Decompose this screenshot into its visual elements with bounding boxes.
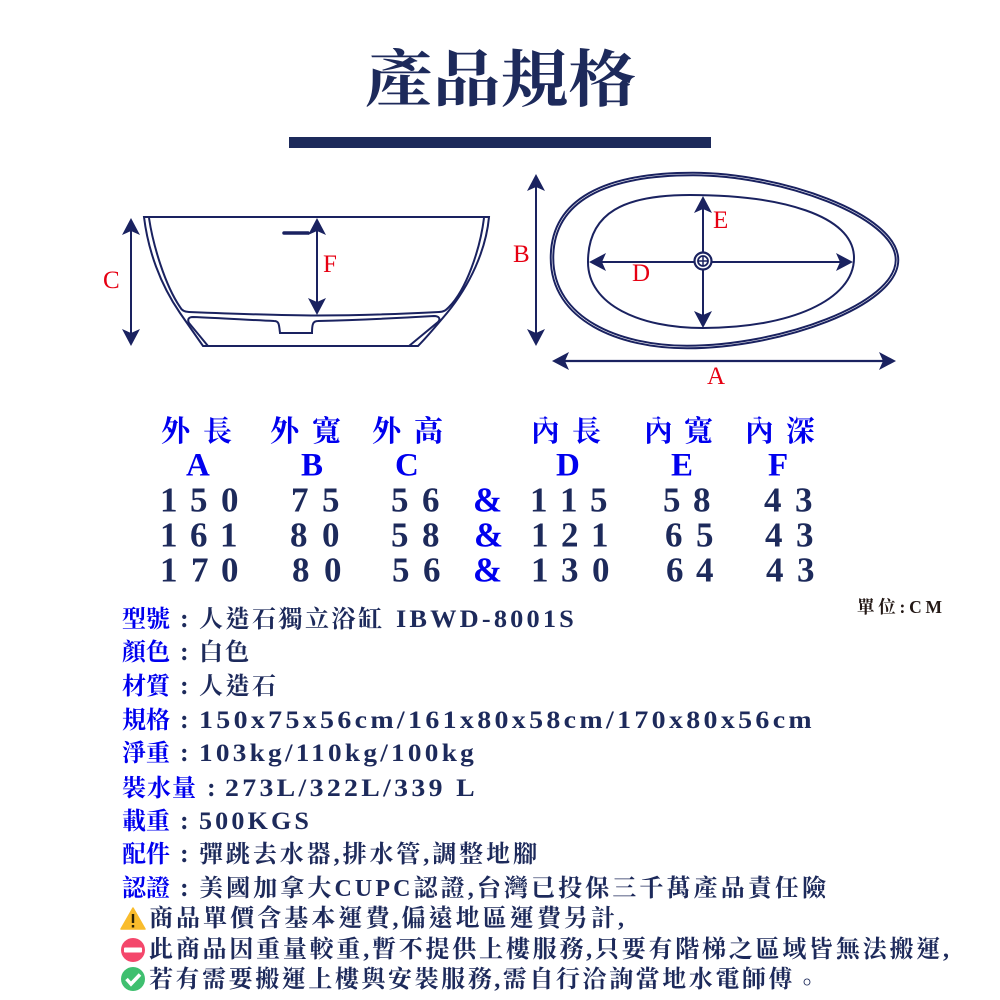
spec: load: 載重	[122, 808, 170, 835]
arrow F	[316, 230, 318, 305]
arrow C	[130, 230, 132, 334]
table row 170: &	[473, 550, 502, 590]
table row 161	[160, 516, 814, 554]
table row 150: 58	[663, 480, 710, 520]
unit note: 單位:CM	[857, 597, 942, 617]
table row 161: 65	[665, 516, 714, 554]
arrow D	[600, 261, 842, 263]
table row 161: 58	[391, 516, 440, 554]
spec: material: 材質	[122, 673, 173, 700]
tub side outline	[144, 217, 489, 346]
table row 161: 161	[160, 516, 238, 554]
spec: material: :	[180, 671, 189, 700]
spec: colour: 白色	[199, 639, 249, 666]
spec: accessories: :	[180, 839, 189, 868]
table row 170: 56	[392, 550, 440, 590]
table row 150: 115	[530, 480, 608, 520]
icon: warning triangle	[121, 908, 145, 929]
icon: no entry	[121, 938, 145, 962]
table row 150	[160, 480, 812, 520]
faucet slot	[284, 231, 308, 235]
spec: weight	[122, 738, 477, 767]
spec: model	[122, 604, 577, 633]
arrowhead C	[122, 218, 140, 346]
inner basin	[588, 195, 854, 328]
spec: certification: 美國加拿大CUPC認證,台灣已投保三千萬產品責任險	[199, 875, 827, 902]
arrowhead F	[308, 218, 326, 315]
drain	[694, 252, 712, 270]
spec: colour: 顏色	[122, 639, 170, 666]
arrowhead B	[527, 174, 545, 346]
table header letters	[186, 448, 788, 484]
table row 161: 80	[290, 516, 340, 554]
table row 161: 43	[765, 516, 814, 554]
label F: F	[323, 251, 337, 278]
specification list	[122, 604, 949, 997]
table headers: 外長	[161, 409, 232, 450]
title: 產品規格	[365, 46, 636, 115]
spec: size: 150x75x56cm/161x80x58cm/170x80x56cm	[199, 707, 815, 734]
spec: model: 人造石獨立浴缸	[199, 606, 382, 633]
diagram: tub top view	[513, 174, 897, 390]
table row 150: 75	[291, 480, 340, 520]
table headers: 外高	[372, 409, 443, 450]
spec: capacity: :	[207, 773, 216, 802]
arrow A	[564, 360, 884, 362]
spec: material: 人造石	[199, 673, 276, 700]
table headers	[161, 409, 815, 450]
spec: model: IBWD-8001S	[396, 606, 577, 633]
title underline bar	[289, 137, 711, 148]
diagram: tub side view	[103, 217, 489, 346]
spec: certification: :	[180, 873, 189, 902]
notice: no upstairs delivery: 此商品因重量較重,暫不提供上樓服務,只要有階梯之區域皆無法搬運,	[149, 936, 949, 963]
arrow B	[535, 186, 537, 334]
table header letters: C	[395, 448, 419, 484]
spec: load: 500KGS	[199, 808, 312, 835]
spec: model: 型號	[122, 606, 170, 633]
table row 150: 56	[391, 480, 440, 520]
table row 150: 150	[160, 480, 238, 520]
table headers: 內寬	[644, 409, 713, 450]
notice: contact: 若有需要搬運上樓與安裝服務,需自行洽詢當地水電師傅	[149, 967, 792, 993]
spec: accessories: 彈跳去水器,排水管,調整地腳	[199, 841, 537, 868]
table header letters: D	[556, 448, 580, 484]
label D: D	[632, 260, 650, 287]
table header letters: B	[301, 448, 323, 484]
arrowhead D	[589, 253, 853, 271]
table headers: 外寬	[270, 409, 341, 450]
spec: accessories: 配件	[122, 841, 170, 868]
table row 170: 170	[160, 550, 238, 590]
spec: certification: 認證	[122, 875, 170, 902]
table header letters: A	[186, 448, 210, 484]
spec: model: :	[180, 604, 189, 633]
spec: capacity	[122, 773, 478, 802]
spec: weight: :	[180, 738, 189, 767]
arrowhead E	[694, 196, 712, 328]
spec: weight: 淨重	[122, 740, 170, 767]
notice: contact: 。	[795, 971, 819, 997]
spec: material	[122, 671, 276, 700]
spec: colour: :	[180, 637, 189, 666]
notice: shipping: 商品單價含基本運費,偏遠地區運費另計,	[149, 904, 624, 932]
label C: C	[103, 267, 120, 294]
table row 170: 64	[666, 550, 714, 590]
spec: capacity: 273L/322L/339 L	[225, 775, 478, 802]
tub inner basin	[149, 218, 484, 316]
table row 150: 43	[764, 480, 812, 520]
label A: A	[707, 363, 725, 390]
table row 170: 130	[531, 550, 610, 590]
spec: weight: 103kg/110kg/100kg	[199, 740, 477, 767]
table row 170: 43	[766, 550, 814, 590]
icon: check mark	[121, 967, 145, 991]
table row 161: 121	[531, 516, 608, 554]
table headers: 內深	[745, 409, 815, 450]
spec: load	[122, 806, 312, 835]
table row 150: &	[473, 480, 502, 520]
label B: B	[513, 241, 530, 268]
spec: capacity: 裝水量	[122, 775, 196, 802]
outer rim highlight	[552, 174, 897, 347]
table row 170	[160, 550, 814, 590]
arrow E	[702, 208, 704, 316]
table row 170: 80	[292, 550, 342, 590]
dimension table	[160, 409, 815, 590]
table header letters: F	[768, 448, 788, 484]
label E: E	[713, 207, 728, 234]
spec: size: :	[180, 705, 189, 734]
spec: colour	[122, 637, 249, 666]
table row 161: &	[474, 516, 503, 554]
table header letters: E	[671, 448, 693, 484]
table headers: 內長	[531, 409, 601, 450]
spec: size: 規格	[122, 707, 170, 734]
tub base cavity	[188, 316, 439, 346]
arrowhead A	[552, 352, 896, 370]
spec: load: :	[180, 806, 189, 835]
outer rim	[552, 174, 897, 347]
